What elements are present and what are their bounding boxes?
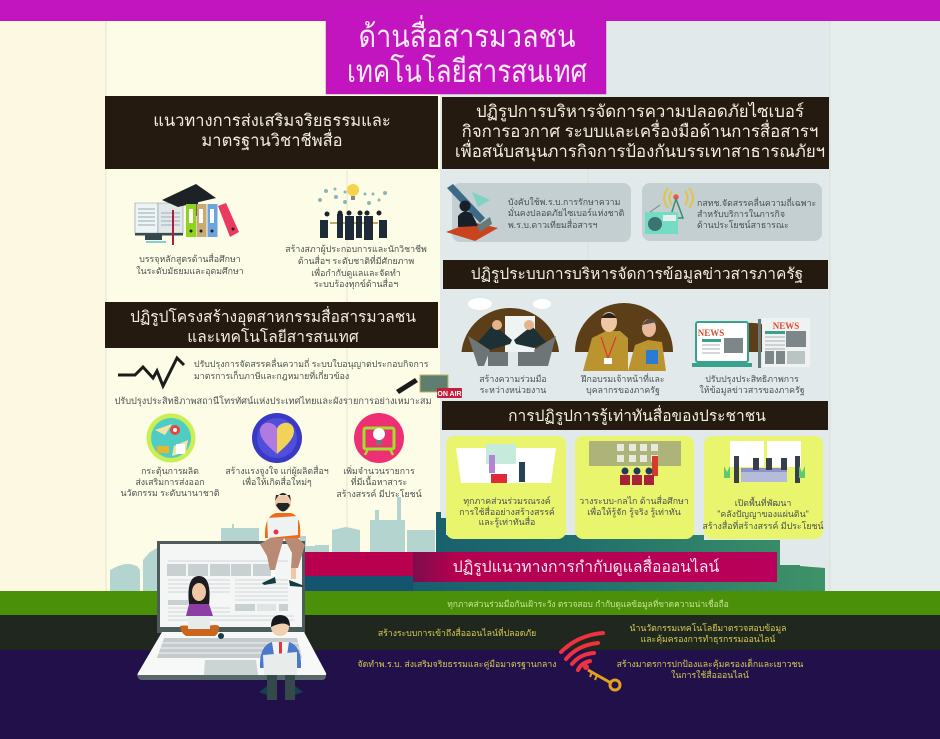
icon: hacker and satellite bbox=[446, 184, 498, 241]
band: purple: ในการใช้สื่อออนไลน์ bbox=[671, 669, 749, 680]
panel: cyber law: มั่นคงปลอดภัยไซเบอร์แห่งชาติ bbox=[508, 207, 625, 218]
text: media professional council: ด้านสื่อฯ ระดับชาติที่มีศักยภาพ bbox=[298, 255, 414, 266]
text: cooperation: สร้างความร่วมมือ bbox=[479, 374, 547, 384]
icon: radio and tower bbox=[645, 188, 693, 234]
title box: เทคโนโลยีสารสนเทศ bbox=[347, 54, 587, 89]
card: national knowledge: สร้างสื่อที่สร้างสรรค์ มีประโยชน์ bbox=[703, 520, 824, 531]
text: frequency allocation bbox=[194, 358, 429, 381]
text: media professional council: เพื่อกำกับดูแลและจัดทำ bbox=[311, 267, 401, 279]
heading: ethics and media standards: แนวทางการส่งเสริมจริยธรรมและ bbox=[153, 112, 391, 130]
card: national knowledge: "คลังปัญญาของแผ่นดิน" bbox=[717, 509, 809, 519]
icon: council meeting and light bulb bbox=[318, 184, 387, 240]
heading: industry structure: และเทคโนโลยีสารสนเทศ bbox=[187, 328, 359, 346]
icon: handshake bbox=[462, 298, 559, 366]
text: incentive: เพื่อให้เกิดสื่อใหม่ๆ bbox=[242, 476, 312, 487]
heading: cyber security: เพื่อสนับสนุนภารกิจการป้องกันบรรเทาสาธารณภัยฯ bbox=[455, 139, 825, 162]
heading: cyber security bbox=[442, 97, 829, 169]
band: green bbox=[0, 591, 940, 615]
text: improve public information bbox=[699, 374, 805, 396]
heading: industry structure: ปฏิรูปโครงสร้างอุตสาหกรรมสื่อสารมวลชน bbox=[130, 306, 416, 327]
text: media curriculum: บรรจุหลักสูตรด้านสื่อศึกษา bbox=[139, 253, 241, 265]
card: media education: วางระบบ-กลไก ด้านสื่อศึกษา bbox=[579, 495, 689, 506]
card: campaign bbox=[446, 436, 566, 539]
text: media curriculum bbox=[136, 253, 244, 277]
text: media professional council: สร้างสภาผู้ประกอบการและนักวิชาชีพ bbox=[285, 244, 427, 255]
heading: ethics and media standards: มาตรฐานวิชาชีพสื่อ bbox=[201, 129, 343, 150]
card: national knowledge bbox=[703, 436, 824, 539]
text: incentive: สร้างแรงจูงใจ แก่ผู้ผลิตสื่อฯ bbox=[225, 465, 329, 477]
icon: remote, tv and on air sign bbox=[396, 375, 462, 398]
band: dark bbox=[0, 615, 940, 650]
icon: remote, tv and on air sign: ON AIR bbox=[437, 391, 462, 398]
heading: ethics and media standards bbox=[105, 96, 438, 169]
text: stimulate production: ส่งเสริมการส่งออก bbox=[135, 477, 205, 487]
heading: cyber security: กิจการอวกาศ ระบบและเครื่องมือด้านการสื่อสารฯ bbox=[462, 119, 818, 141]
band: dark: นำนวัตกรรมเทคโนโลยีมาตรวจสอบข้อมูล bbox=[630, 623, 786, 634]
banner: online media: ปฏิรูปแนวทางการกำกับดูแลสื่อออนไลน์ bbox=[453, 555, 720, 577]
text: cooperation bbox=[479, 374, 547, 395]
band: green: ทุกภาคส่วนร่วมมือกันเฝ้าระวัง ตรวจสอบ กำกับดูแลข้อมูลที่ขาดความน่าเชื่อถือ bbox=[447, 598, 729, 610]
panel: cyber law bbox=[446, 183, 631, 242]
heading: state information: ปฏิรูประบบการบริหารจัดการข้อมูลข่าวสารภาครัฐ bbox=[471, 266, 803, 284]
panel: cyber law: พ.ร.บ.ดาวเทียมสื่อสารฯ bbox=[508, 219, 597, 230]
text: stimulate production: นวัตกรรม ระดับนานาชาติ bbox=[121, 488, 220, 498]
heading: media literacy bbox=[442, 401, 828, 430]
text: media professional council bbox=[285, 244, 427, 290]
person: man in front bbox=[259, 615, 303, 700]
icon: news on laptop and newspaper: NEWS bbox=[773, 321, 799, 331]
card: campaign: การใช้สื่ออย่างสร้างสรรค์ bbox=[459, 506, 555, 517]
panel: public frequency bbox=[642, 183, 822, 241]
icon: tv idea circle bbox=[354, 413, 404, 463]
title box: ด้านสื่อสารมวลชน bbox=[358, 15, 576, 54]
heading: cyber security: ปฏิรูปการบริหารจัดการความปลอดภัยไซเบอร์ bbox=[476, 101, 804, 122]
panel: cyber law: บังคับใช้พ.ร.บ.การรักษาความ bbox=[508, 197, 620, 207]
band: dark: สร้างระบบการเข้าถึงสื่อออนไลน์ที่ปลอดภัย bbox=[378, 627, 536, 638]
text: increase programmes: เพิ่มจำนวนรายการ bbox=[343, 465, 415, 476]
card: campaign: ทุกภาคส่วนร่วมรณรงค์ bbox=[463, 496, 551, 507]
text: cooperation: ระหว่างหน่วยงาน bbox=[480, 385, 546, 395]
text: increase programmes bbox=[336, 465, 422, 499]
band: purple: จัดทำพ.ร.บ. ส่งเสริมจริยธรรมและคู่มือมาตรฐานกลาง bbox=[358, 659, 556, 670]
person: man on top bbox=[260, 493, 305, 587]
person: woman sitting bbox=[180, 576, 224, 639]
title box bbox=[326, 2, 606, 94]
skyline: dark teal and green city bbox=[305, 512, 825, 591]
icon: books and graduation cap bbox=[135, 184, 239, 245]
text: frequency allocation: ปรับปรุงการจัดสรรคลื่นความถี่ ระบบใบอนุญาตประกอบกิจการ bbox=[194, 358, 429, 370]
panel: public frequency: กสทช.จัดสรรคลื่นความถี่เฉพาะ bbox=[697, 197, 816, 208]
text: frequency allocation: มาตรการเก็บภาษีและกฎหมายที่เกี่ยวข้อง bbox=[194, 370, 349, 381]
text: increase programmes: สร้างสรรค์ มีประโยชน์ bbox=[336, 489, 422, 499]
icon: news on laptop and newspaper bbox=[692, 318, 810, 368]
band: purple bbox=[0, 650, 940, 739]
heading: media literacy: การปฏิรูปการรู้เท่าทันสื่อของประชาชน bbox=[508, 405, 766, 426]
laptop bbox=[137, 541, 326, 680]
band: purple: สร้างมาตรการปกป้องและคุ้มครองเด็กและเยาวชน bbox=[617, 658, 803, 670]
text: train officers bbox=[581, 373, 665, 396]
text: train officers: ฝึกอบรมเจ้าหน้าที่และ bbox=[581, 373, 665, 384]
card: media education: เพื่อให้รู้จัก รู้จริง รู้เท่าทัน bbox=[587, 506, 681, 518]
heading: industry structure bbox=[105, 302, 438, 348]
icon: heart circle bbox=[252, 413, 302, 463]
text: media professional council: ระบบร้องทุกข์ด้านสื่อฯ bbox=[314, 278, 398, 290]
text: improve public information: ปรับปรุงประสิทธิภาพการ bbox=[705, 374, 799, 385]
card: campaign: และรู้เท่าทันสื่อ bbox=[479, 516, 535, 528]
text: increase programmes: ที่มีเนื้อหาสาระ bbox=[351, 475, 407, 487]
text: train officers: บุคลากรของภาครัฐ bbox=[586, 385, 660, 396]
text: incentive bbox=[225, 465, 329, 487]
icon: wifi and key bbox=[561, 633, 620, 690]
skyline: left light city bbox=[110, 497, 435, 591]
card: media education bbox=[575, 436, 694, 539]
band: dark: และคุ้มครองการทำธุรกรรมออนไลน์ bbox=[641, 634, 775, 645]
text: stimulate production: กระตุ้นการผลิต bbox=[141, 466, 199, 477]
text: thai television: ปรับปรุงประสิทธิภาพสถานีโทรทัศน์แห่งประเทศไทยและผังรายการอย่างเหมาะสม bbox=[114, 395, 432, 407]
panel: public frequency: ด้านประโยชน์สาธารณะ bbox=[697, 220, 789, 230]
icon: news on laptop and newspaper: NEWS bbox=[698, 328, 724, 338]
text: stimulate production bbox=[121, 466, 220, 498]
text: media curriculum: ในระดับมัธยมและอุดมศึกษา bbox=[136, 266, 244, 277]
illustration: laptop with people bbox=[137, 493, 326, 700]
panel: public frequency: สำหรับบริการในภารกิจ bbox=[697, 209, 785, 219]
text: improve public information: ให้ข้อมูลข่าวสารของภาครัฐ bbox=[699, 385, 805, 396]
icon: government officers bbox=[575, 303, 673, 371]
banner: online media bbox=[305, 552, 777, 591]
icon: frequency wave bbox=[118, 358, 184, 386]
card: national knowledge: เปิดพื้นที่พัฒนา bbox=[735, 496, 791, 508]
icon: global export circle bbox=[146, 414, 196, 462]
heading: state information bbox=[443, 260, 828, 289]
